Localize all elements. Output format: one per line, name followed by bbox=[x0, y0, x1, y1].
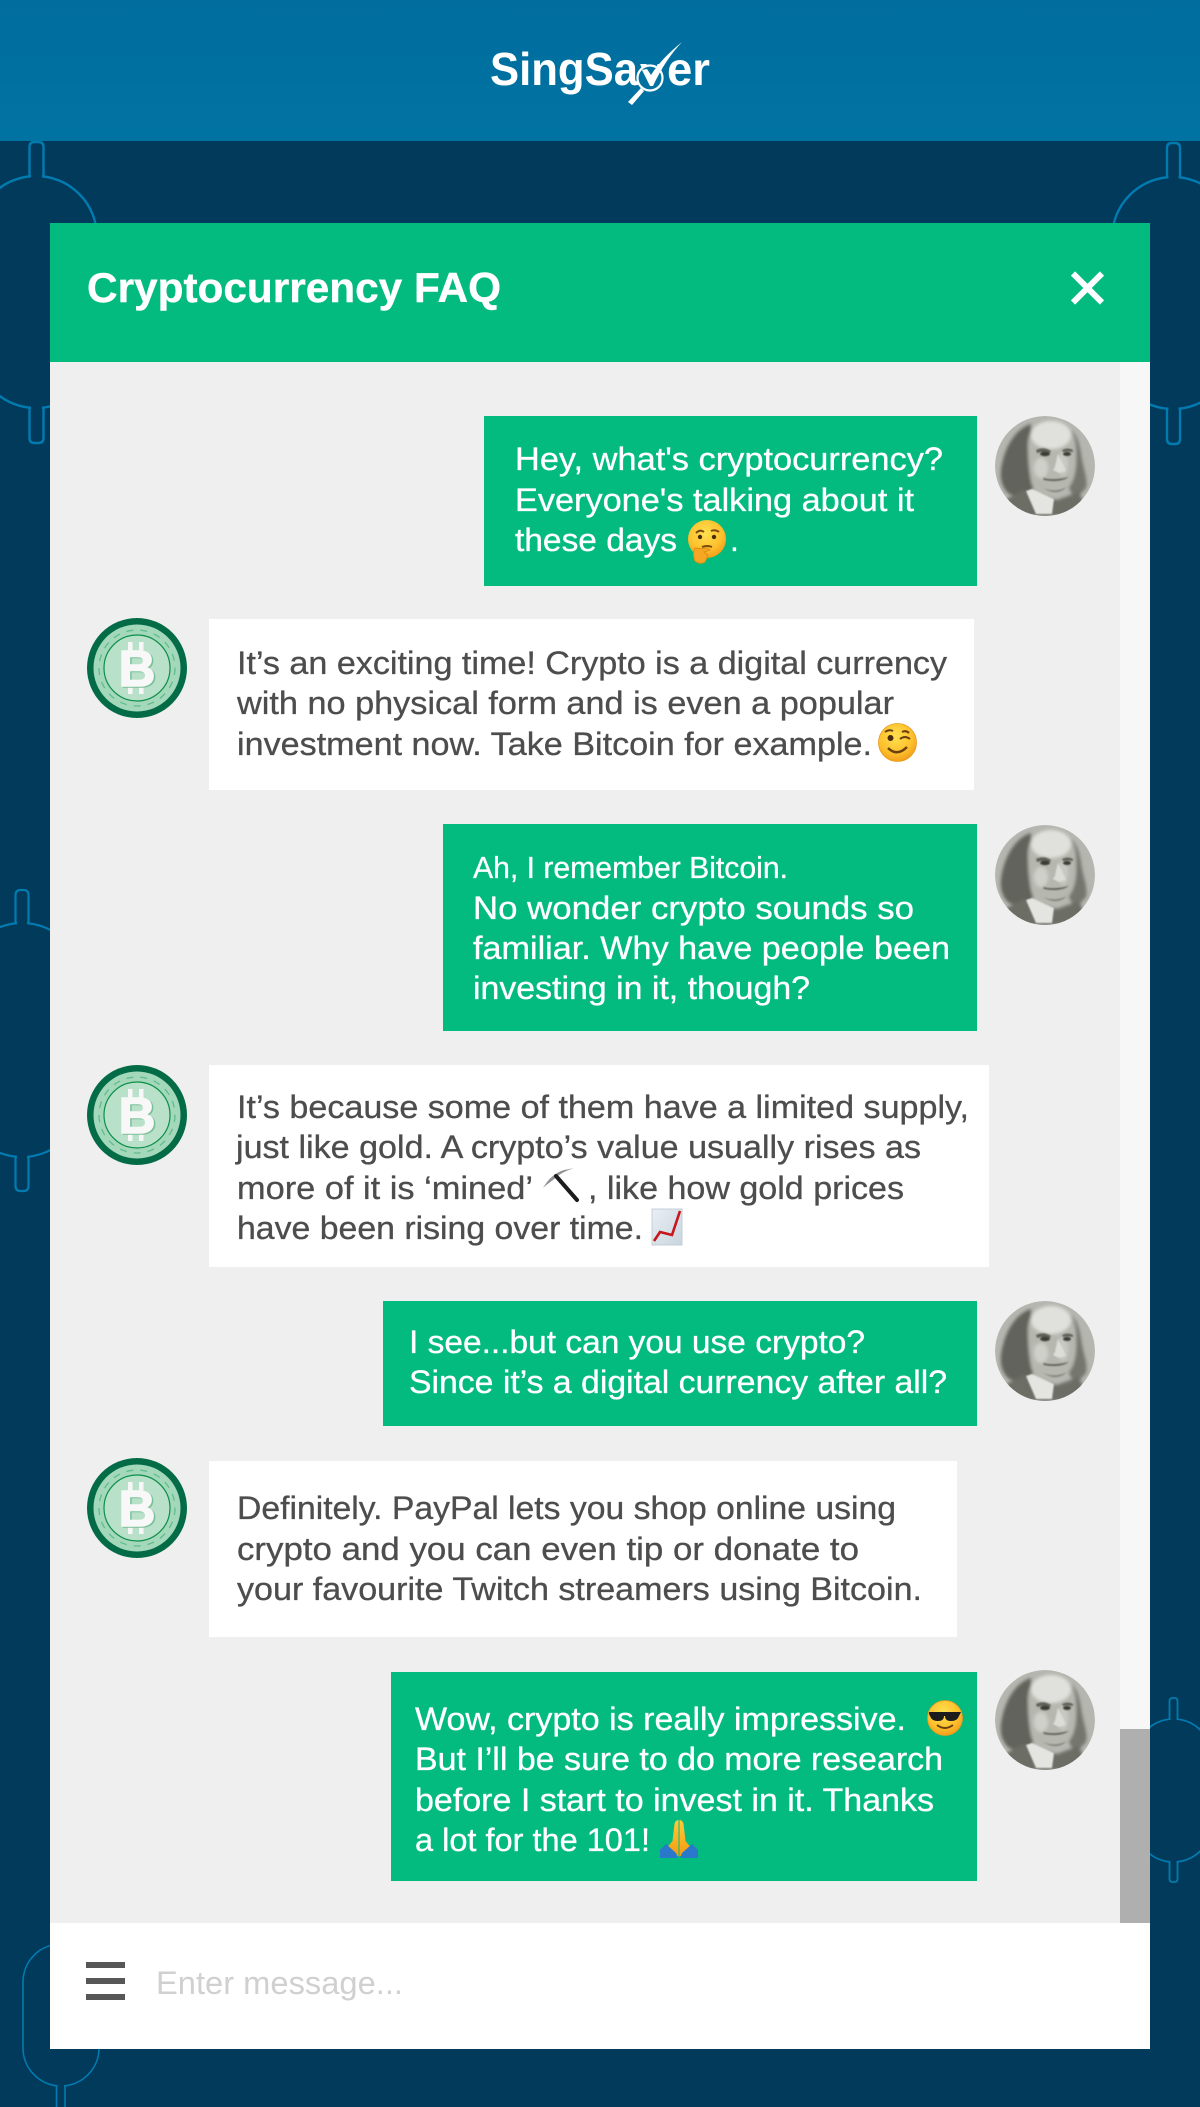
chat window bbox=[50, 223, 1150, 2049]
icon: winking face bbox=[878, 724, 916, 762]
input placeholder: Enter message... bbox=[156, 1965, 403, 2001]
message 1 text: Hey, what's cryptocurrency? bbox=[515, 441, 943, 477]
logo: SingSaver: SingSa bbox=[490, 43, 638, 95]
avatar: bitcoin bbox=[87, 1065, 187, 1165]
message 1 text bbox=[515, 441, 943, 558]
heading: Cryptocurrency FAQ bbox=[87, 264, 501, 311]
message 2 text: It’s an exciting time! Crypto is a digital currency bbox=[237, 645, 947, 681]
message 2 text: with no physical form and is even a popular bbox=[236, 685, 894, 721]
message 5 text bbox=[409, 1324, 947, 1400]
message 6 text bbox=[237, 1490, 922, 1607]
message 6 text: crypto and you can even tip or donate to bbox=[237, 1531, 859, 1567]
icon: hamburger menu bbox=[86, 1962, 125, 2000]
background candlestick: bottom left bbox=[23, 1944, 99, 2107]
message 7 text bbox=[415, 1701, 943, 1858]
icon: praying hands bbox=[660, 1820, 698, 1858]
message 3 text: familiar. Why have people been bbox=[473, 930, 950, 966]
message 4 text: It’s because some of them have a limited supply, bbox=[237, 1089, 969, 1125]
message 6 text: your favourite Twitch streamers using Bitcoin. bbox=[237, 1571, 922, 1607]
message 2: bot bbox=[209, 619, 974, 790]
message 4 text: have been rising over time. bbox=[237, 1210, 643, 1246]
logo: SingSaver: er bbox=[667, 43, 710, 95]
message 4 text bbox=[235, 1089, 969, 1246]
icon: thinking face bbox=[688, 520, 726, 563]
message 4: bot bbox=[209, 1065, 989, 1267]
message 2 text bbox=[236, 645, 947, 762]
message 5: user bbox=[383, 1301, 977, 1426]
message 7 text: Wow, crypto is really impressive. bbox=[415, 1701, 906, 1737]
message 4 text: more of it is ‘mined’ bbox=[237, 1170, 533, 1206]
background candlestick: lower right bbox=[1135, 1698, 1200, 1882]
message 6: bot bbox=[209, 1461, 957, 1637]
message 7 text: before I start to invest in it. Thanks bbox=[415, 1782, 934, 1818]
icon: rising chart bbox=[652, 1209, 682, 1245]
background candlestick: middle left bbox=[0, 890, 83, 1191]
message 3 text: No wonder crypto sounds so bbox=[473, 890, 914, 926]
message 1 text: Everyone's talking about it bbox=[515, 482, 914, 518]
avatar: user bbox=[995, 1670, 1095, 1770]
scrollbar bbox=[1120, 362, 1150, 1923]
message 4 text: just like gold. A crypto’s value usually rises as bbox=[235, 1129, 921, 1165]
message 3 text: Ah, I remember Bitcoin. bbox=[473, 850, 788, 885]
icon: pick bbox=[543, 1168, 577, 1200]
message 7 text: But I’ll be sure to do more research bbox=[415, 1741, 943, 1777]
message 6 text: Definitely. PayPal lets you shop online using bbox=[237, 1490, 896, 1526]
message 5 text: I see...but can you use crypto? bbox=[409, 1324, 865, 1360]
chat body background bbox=[50, 362, 1120, 1923]
message 7 text: a lot for the 101! bbox=[415, 1822, 650, 1858]
avatar: user bbox=[995, 416, 1095, 516]
icon: sunglasses face bbox=[928, 1700, 962, 1736]
message 7: user bbox=[391, 1672, 977, 1881]
message 3 text bbox=[473, 850, 950, 1006]
message input bar bbox=[50, 1923, 1150, 2049]
top brand bar bbox=[0, 0, 1200, 141]
avatar: user bbox=[995, 1301, 1095, 1401]
message 3 text: investing in it, though? bbox=[473, 970, 810, 1006]
avatar: bitcoin bbox=[87, 618, 187, 718]
message 5 text: Since it’s a digital currency after all? bbox=[409, 1364, 947, 1400]
window title bar bbox=[50, 223, 1150, 362]
message 3: user bbox=[443, 824, 977, 1031]
message 1 text: these days bbox=[515, 522, 677, 558]
avatar: user bbox=[995, 825, 1095, 925]
icon: close bbox=[1073, 274, 1102, 302]
background candlestick: top left bbox=[0, 142, 97, 443]
logo: SingSaver bbox=[490, 42, 710, 105]
background candlestick: top right bbox=[1112, 143, 1200, 444]
message 4 text: , like how gold prices bbox=[588, 1170, 904, 1206]
logo: SingSaver: v bbox=[640, 50, 665, 94]
message 1: user bbox=[484, 416, 977, 586]
avatar: bitcoin bbox=[87, 1458, 187, 1558]
message 1 text: . bbox=[730, 522, 739, 558]
message 2 text: investment now. Take Bitcoin for example. bbox=[237, 726, 872, 762]
